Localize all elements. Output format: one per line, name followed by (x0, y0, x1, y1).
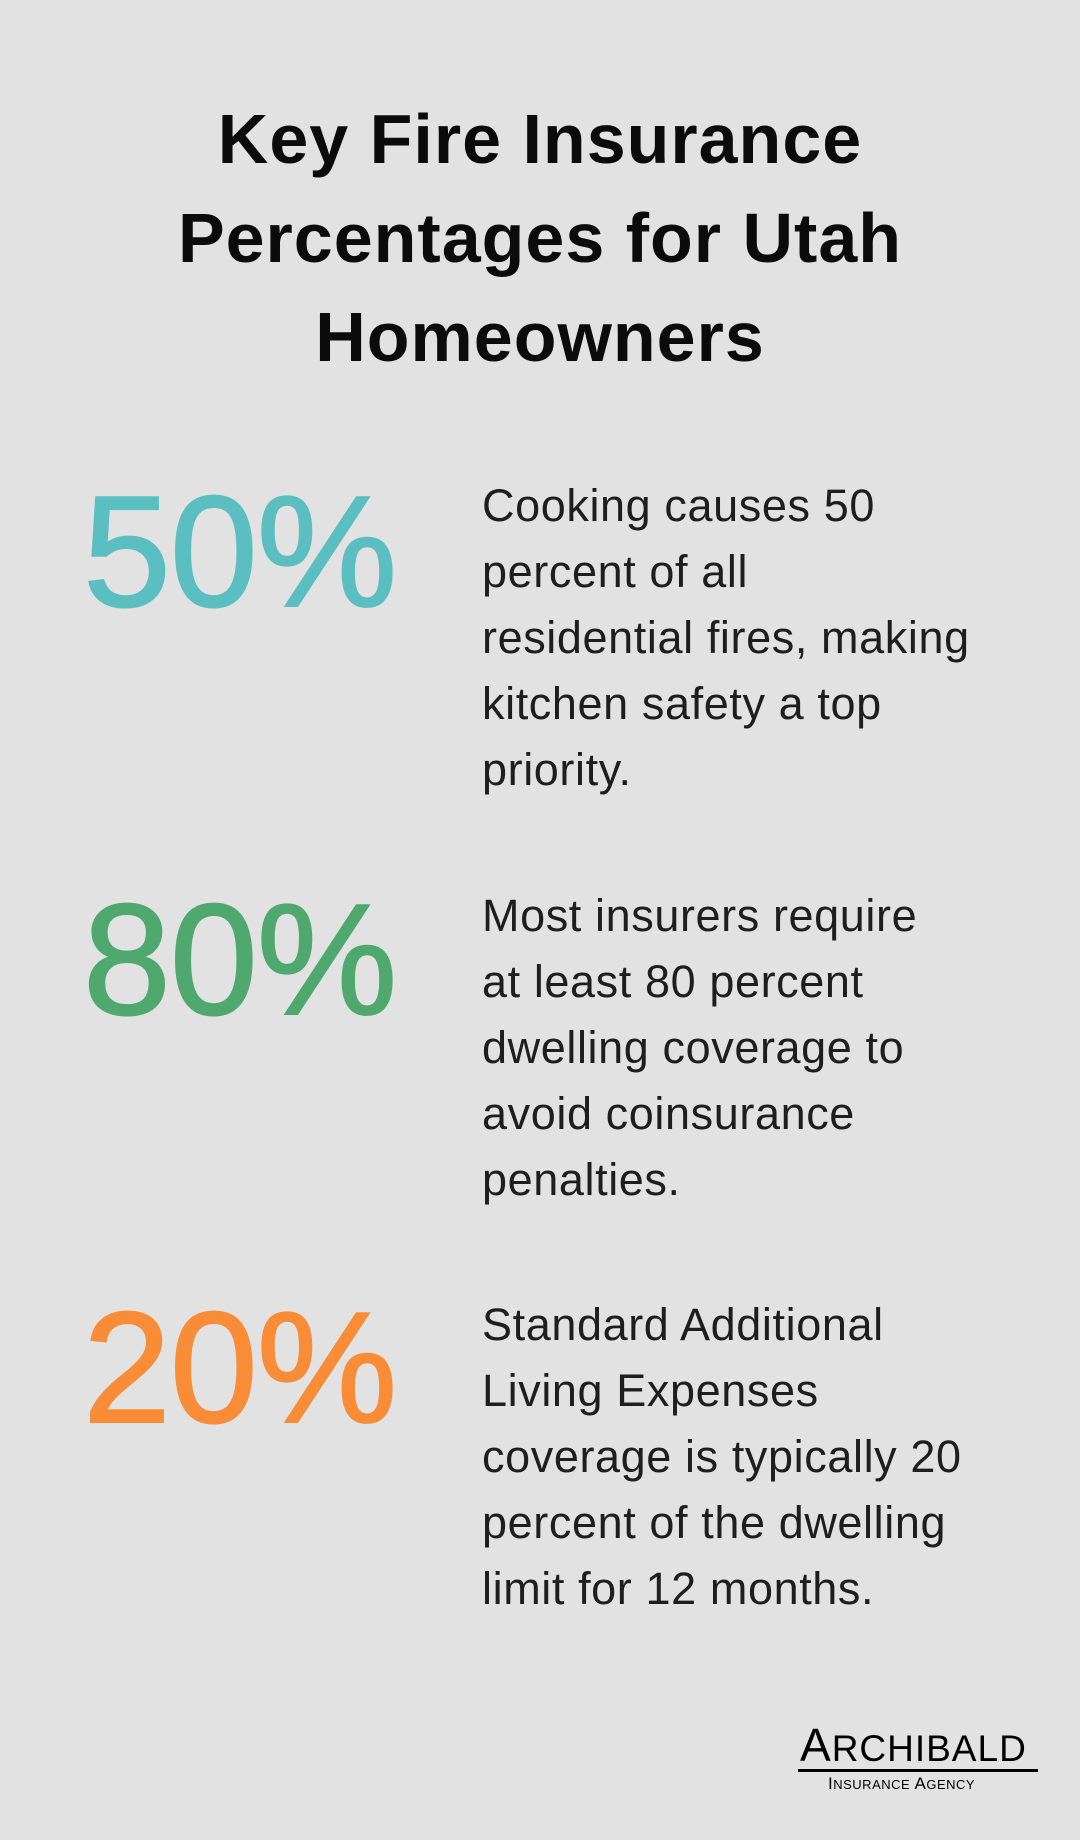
text: cooking: percent of all (482, 546, 748, 597)
text: coverage: penalties. (482, 1154, 681, 1205)
logo (798, 1719, 1038, 1793)
text: cooking: kitchen safety a top (482, 678, 882, 729)
text: coverage: dwelling coverage to (482, 1022, 904, 1073)
text: cooking (482, 480, 970, 795)
text: living expenses: Standard Additional (482, 1299, 884, 1350)
text: coverage (482, 890, 917, 1205)
title: Homeowners (315, 298, 765, 376)
stat: 50%: 50% (83, 464, 396, 640)
text: living expenses (482, 1299, 962, 1614)
text: coverage: Most insurers require (482, 890, 917, 941)
text: living expenses: Living Expenses (482, 1365, 819, 1416)
text: living expenses: percent of the dwelling (482, 1497, 946, 1548)
stat: 20%: 20% (83, 1280, 396, 1456)
text: living expenses: limit for 12 months. (482, 1563, 874, 1614)
logo name: ARCHIBALD (800, 1719, 1027, 1771)
text: cooking: residential fires, making (482, 612, 970, 663)
text: living expenses: coverage is typically 20 (482, 1431, 962, 1482)
text: coverage: avoid coinsurance (482, 1088, 855, 1139)
stat: 80%: 80% (83, 872, 396, 1048)
title: Key Fire Insurance (218, 100, 862, 178)
title: Percentages for Utah (178, 199, 902, 277)
logo subtitle: INSURANCE AGENCY (828, 1774, 975, 1793)
text: cooking: priority. (482, 744, 632, 795)
text: coverage: at least 80 percent (482, 956, 864, 1007)
text: cooking: Cooking causes 50 (482, 480, 875, 531)
title (178, 100, 902, 376)
